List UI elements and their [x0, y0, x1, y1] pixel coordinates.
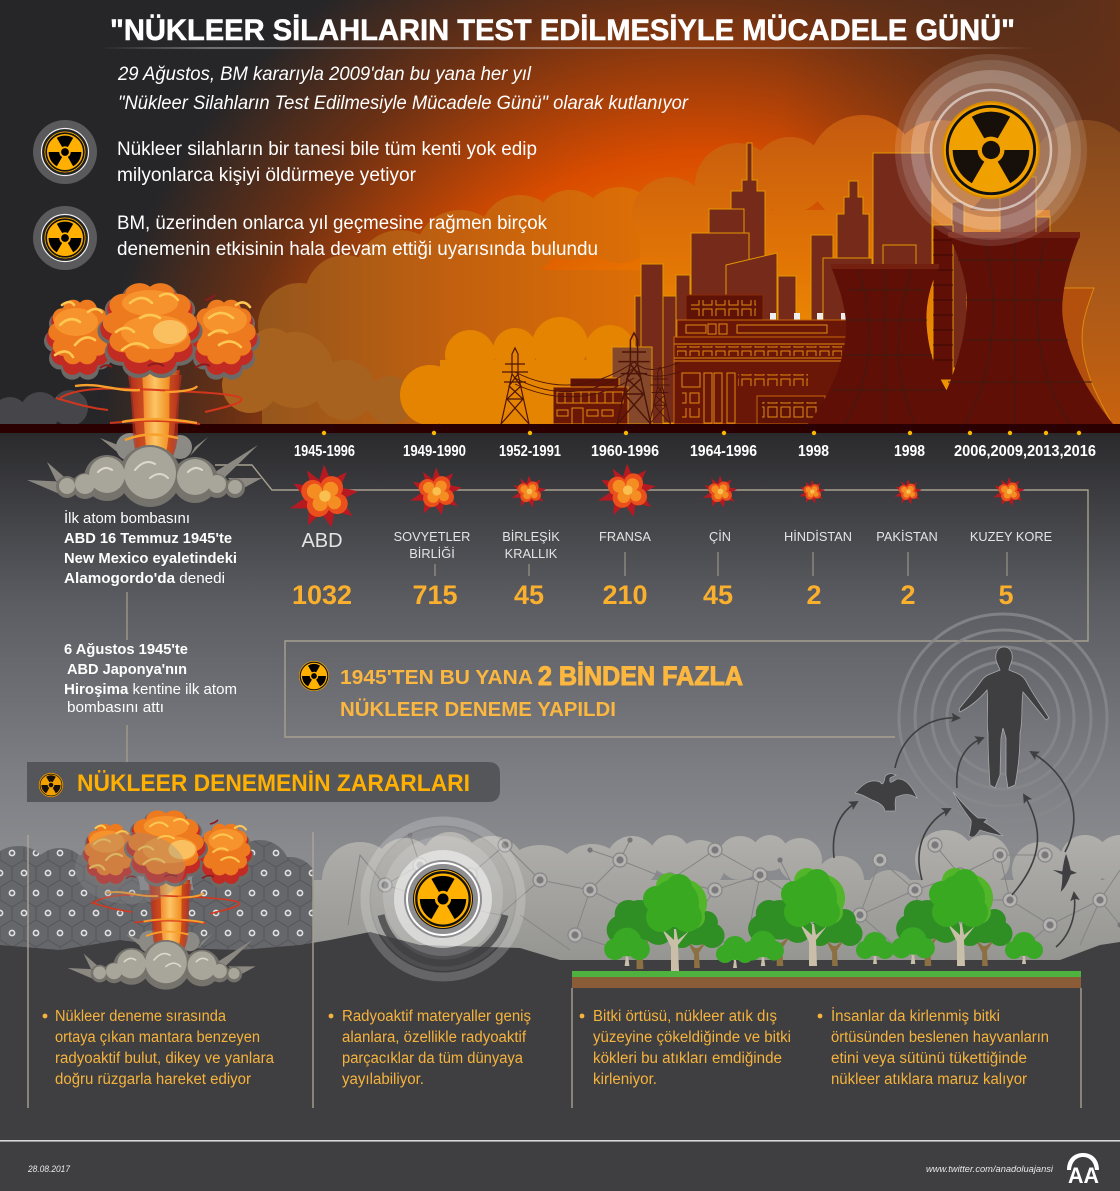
logo: Anadolu Agency	[1067, 1153, 1099, 1188]
test counts: 45	[514, 580, 544, 610]
column 4: human exposure text	[818, 1007, 1049, 1088]
country names: ÇİN	[709, 529, 731, 544]
test counts: 2	[900, 580, 916, 610]
test years: 1998	[798, 443, 829, 460]
top panel: orange sky background	[0, 0, 1120, 425]
country names: PAKİSTAN	[876, 529, 938, 544]
test counts: 2	[806, 580, 822, 610]
callout: more than 2000 tests: 2 BİNDEN FAZLA	[538, 661, 743, 691]
bullet text 1	[117, 139, 537, 186]
bullet text 2: denemenin etkisinin hala devam ettiği uyarısında bulundu	[117, 239, 598, 260]
section heading: harms of nuclear testing: NÜKLEER DENEMENİN ZARARLARI	[77, 770, 470, 797]
test years: 2006,2009,2013,2016	[954, 443, 1096, 460]
column 1: cloud text	[43, 1008, 274, 1088]
column 2: radioactive material text	[329, 1008, 531, 1088]
column 3: vegetation text: kökleri bu atıkları emdiğinde	[593, 1050, 782, 1067]
icon: mushroom cloud top	[27, 283, 262, 507]
logo: Anadolu Agency: AA	[1068, 1163, 1099, 1188]
grey lower sky	[0, 853, 1120, 953]
column 3: vegetation text: kirleniyor.	[593, 1071, 657, 1088]
column 1: cloud text: doğru rüzgarla hareket ediyor	[55, 1071, 251, 1088]
column 1: cloud text: radyoaktif bulut, dikey ve yanlara	[55, 1050, 274, 1067]
column 1: cloud text: ortaya çıkan mantara benzeyen	[55, 1029, 260, 1046]
column 1: cloud text: Nükleer deneme sırasında	[55, 1008, 226, 1025]
footer date: 28.08.2017	[27, 1164, 71, 1175]
trees	[604, 868, 1043, 971]
left connector lines	[126, 592, 128, 765]
test counts: 210	[602, 580, 648, 610]
bullet text 1: Nükleer silahların bir tanesi bile tüm kenti yok edip	[117, 139, 537, 160]
left note: Hiroshima: 6 Ağustos 1945'te	[64, 641, 188, 658]
test years: 1945-1996	[294, 443, 355, 460]
bullet text 1: milyonlarca kişiyi öldürmeye yetiyor	[117, 165, 417, 186]
title: "NÜKLEER SİLAHLARIN TEST EDİLMESİYLE MÜCADELE GÜNÜ"	[110, 14, 1015, 47]
subtitle text	[117, 64, 689, 114]
ground	[0, 932, 1120, 1191]
left note: first test: New Mexico eyaletindeki	[64, 550, 237, 567]
connector ticks	[435, 552, 1007, 576]
test counts	[292, 580, 1014, 610]
column 2: radioactive material text: Radyoaktif materyaller geniş	[342, 1008, 531, 1025]
middle panel background	[0, 433, 1120, 853]
section heading: harms of nuclear testing	[27, 762, 500, 802]
bullet icon 1	[33, 120, 97, 184]
column 4: human exposure text: İnsanlar da kirlenmiş bitki	[831, 1007, 1000, 1025]
left note: first test: ABD 16 Temmuz 1945'te	[64, 530, 232, 547]
column 4: human exposure text: örtüsünden beslenen hayvanların	[831, 1029, 1049, 1046]
icon: radiation symbol with rings	[365, 821, 521, 977]
low building with windows	[553, 378, 628, 424]
icon: bird with spread wings	[855, 774, 917, 811]
soft haze over lower mushroom	[75, 832, 185, 904]
country names: BİRLİĞİ	[409, 546, 455, 561]
column divider lines	[28, 832, 1081, 1108]
test years: 1960-1996	[591, 443, 659, 460]
test years: 1998	[894, 443, 925, 460]
network cloud	[314, 830, 1120, 972]
test counts: 5	[998, 580, 1014, 610]
callout: more than 2000 tests: 1945'TEN BU YANA	[340, 667, 533, 689]
arrows: contamination chain	[833, 718, 1075, 947]
left note: first test: İlk atom bombasını	[64, 509, 190, 527]
left note: first test: Alamogordo'da denedi	[64, 570, 225, 587]
bullet text 2	[117, 213, 598, 260]
left note: first test	[64, 509, 237, 587]
title underline	[100, 48, 1035, 49]
power lines and pylons	[501, 333, 680, 424]
icon: lower mushroom cloud	[68, 810, 256, 990]
country names: SOVYETLER	[394, 529, 470, 544]
power plant factory building	[674, 295, 849, 424]
hexagon patterned cloud	[0, 840, 312, 950]
country names: BİRLEŞİK	[502, 529, 560, 544]
subtitle text: "Nükleer Silahların Test Edilmesiyle Mücadele Günü" olarak kutlanıyor	[118, 93, 689, 114]
column 4: human exposure text: etini veya sütünü tükettiğinde	[831, 1050, 1027, 1067]
test counts: 45	[703, 580, 733, 610]
column 3: vegetation text: Bitki örtüsü, nükleer atık dış	[593, 1008, 777, 1025]
test years: 1949-1990	[403, 443, 466, 460]
column 2: radioactive material text: alanlara, özellikle radyoaktif	[342, 1029, 527, 1046]
subtitle text: 29 Ağustos, BM kararıyla 2009'dan bu yana her yıl	[117, 64, 532, 85]
ground strips: grass and soil	[572, 971, 1081, 988]
column 2: radioactive material text: yayılabiliyor.	[342, 1071, 424, 1088]
explosion icons per country	[290, 464, 1025, 527]
horizontal dark bar	[0, 424, 1120, 433]
column 2: radioactive material text: parçacıklar da tüm dünyaya	[342, 1050, 523, 1067]
country names	[301, 529, 1052, 561]
test years: 1964-1996	[690, 443, 757, 460]
radiation rings around person	[899, 614, 1107, 822]
footer separator line	[0, 1140, 1120, 1142]
column 4: human exposure text: nükleer atıklara maruz kalıyor	[831, 1071, 1027, 1088]
country names: KRALLIK	[505, 546, 558, 561]
footer source: www.twitter.com/anadoluajansi	[926, 1164, 1054, 1175]
bullet icon 2	[33, 206, 97, 270]
cooling towers	[808, 225, 1113, 424]
icon: small bird	[1050, 853, 1078, 893]
country names: ABD	[301, 530, 343, 552]
test counts: 715	[412, 580, 458, 610]
callout: more than 2000 tests: NÜKLEER DENEME YAPILDI	[340, 698, 616, 721]
country names: KUZEY KORE	[970, 529, 1052, 544]
test years	[294, 443, 1096, 460]
icon: human figure	[959, 647, 1049, 788]
timeline dots	[322, 431, 1081, 435]
test counts: 1032	[292, 580, 352, 610]
bullet text 2: BM, üzerinden onlarca yıl geçmesine rağmen birçok	[117, 213, 547, 234]
icon: diving bird	[953, 792, 1003, 837]
column 3: vegetation text	[580, 1008, 791, 1088]
left note: Hiroshima: Hiroşima kentine ilk atom	[64, 681, 237, 698]
country names: HİNDİSTAN	[784, 529, 852, 544]
test years: 1952-1991	[499, 443, 561, 460]
background clouds	[0, 115, 1120, 433]
timeline connector line	[215, 465, 1088, 737]
city skyline	[612, 143, 1050, 424]
callout: more than 2000 tests	[299, 661, 743, 721]
icon: big radiation symbol with glowing rings	[895, 54, 1087, 246]
left note: Hiroshima: ABD Japonya'nın	[67, 661, 187, 678]
column 3: vegetation text: yüzeyine çökeldiğinde ve bitki	[593, 1029, 791, 1046]
left note: Hiroshima: bombasını attı	[67, 699, 164, 716]
country names: FRANSA	[599, 529, 651, 544]
left note: Hiroshima	[64, 641, 237, 716]
